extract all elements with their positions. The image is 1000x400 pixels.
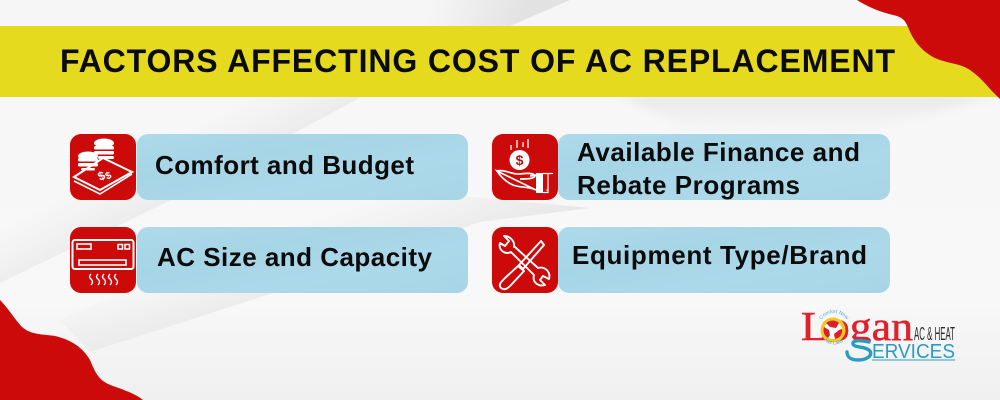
label: Comfort and Budget xyxy=(155,150,414,180)
logo emblem: Comfort Now xyxy=(820,310,848,319)
label: Available Finance and xyxy=(577,137,860,167)
icon: coins and banknote: $ xyxy=(95,168,108,184)
icon: air conditioner xyxy=(70,227,136,293)
title: FACTORS AFFECTING COST OF AC REPLACEMENT xyxy=(60,43,895,79)
factor card: equipment type and brand xyxy=(492,227,890,293)
icon: coin over hand: $ xyxy=(516,152,524,168)
factor card: AC size and capacity xyxy=(70,227,468,293)
logo swoosh S xyxy=(847,341,871,360)
icon: coins and banknote: $ xyxy=(104,170,114,183)
logo emblem: Not Later xyxy=(824,338,843,344)
card panel xyxy=(558,134,890,200)
factor card: comfort and budget xyxy=(70,134,468,200)
red corner shape: top right xyxy=(857,0,1000,99)
company logo xyxy=(802,310,955,363)
logo emblem xyxy=(820,310,848,344)
icon: coins and banknote xyxy=(70,134,136,200)
label: AC Size and Capacity xyxy=(157,242,433,272)
factor card: finance and rebate programs xyxy=(492,134,890,200)
logo text: services: ERVICES xyxy=(872,341,955,363)
icon: coin over hand xyxy=(492,134,558,200)
red corner shape: bottom left xyxy=(0,300,143,400)
title banner xyxy=(0,26,1000,97)
card panel xyxy=(137,134,468,200)
label: Rebate Programs xyxy=(577,170,800,200)
icon: wrench and screwdriver xyxy=(492,227,558,293)
label: Equipment Type/Brand xyxy=(572,240,867,270)
card panel xyxy=(558,227,890,293)
logo wordmark: Logan: Logan xyxy=(801,303,913,349)
card panel xyxy=(137,227,468,293)
